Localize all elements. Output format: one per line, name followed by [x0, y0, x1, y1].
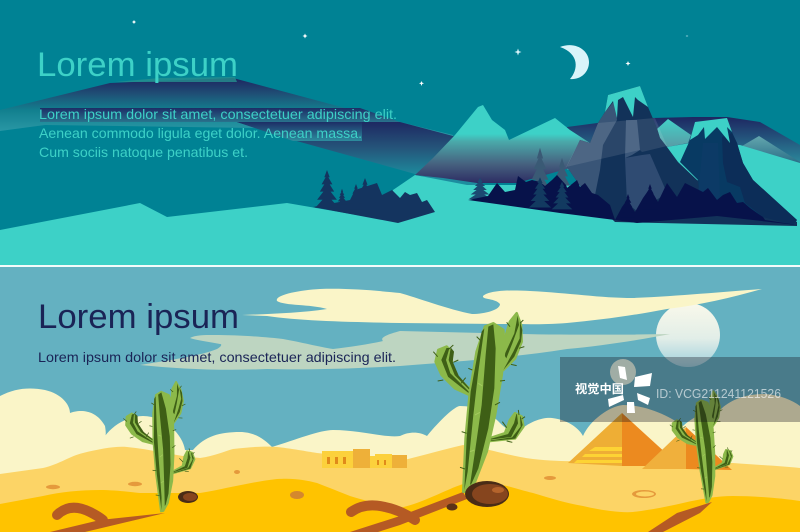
pyramids	[568, 413, 732, 470]
big mountain snow cap	[605, 86, 648, 118]
small volcano mountain	[680, 118, 797, 225]
right dark haze band	[567, 117, 800, 170]
small mountain snow cap	[690, 118, 732, 143]
left dark haze band	[0, 78, 453, 150]
text block: bottom description: Lorem ipsum dolor sit amet, consectetuer adipiscing elit.	[38, 349, 396, 365]
watermark brand text: 视觉中国	[575, 381, 624, 396]
pebbles	[46, 470, 656, 498]
cactus: centre	[433, 313, 525, 492]
watermark logo	[608, 359, 652, 413]
golden foreground dune	[0, 479, 800, 532]
text block: top description	[39, 106, 397, 160]
pale sand dune	[0, 445, 800, 532]
heading: bottom: Lorem ipsum	[38, 298, 239, 336]
watermark id: ID: VCG211241121526	[656, 386, 781, 401]
crescent moon	[560, 45, 589, 79]
cactus: left	[119, 381, 204, 515]
panel: night mountains	[0, 0, 800, 266]
stars	[132, 20, 688, 86]
small back peaks	[657, 119, 800, 165]
watermark banner	[560, 357, 800, 422]
cactus: right	[665, 390, 742, 507]
night sky	[0, 0, 800, 266]
panel: desert	[0, 267, 800, 532]
heading: top: Lorem ipsum	[37, 46, 238, 84]
turquoise ground	[0, 143, 800, 265]
text block: top description: Cum sociis natoque penatibus et.	[39, 144, 248, 160]
village houses	[322, 449, 407, 468]
horizon clouds	[0, 388, 800, 480]
text backing strip: second line	[237, 122, 362, 141]
rocks	[178, 481, 509, 510]
lower dark haze band	[237, 122, 480, 195]
divider	[0, 265, 800, 267]
brown shadows and branches	[50, 492, 712, 532]
text backing strip: first line	[40, 108, 400, 122]
big mountain	[566, 86, 797, 226]
lower green-tinted cloud	[140, 331, 670, 370]
sun	[656, 303, 720, 367]
dark pine forest	[468, 175, 797, 225]
text block: top description: Lorem ipsum dolor sit amet, consectetuer adipiscing elit.	[39, 106, 397, 122]
text block: top description: Aenean commodo ligula eget dolor. Aenean massa.	[39, 125, 362, 141]
upper cream cloud	[242, 289, 762, 324]
desert sky	[0, 267, 800, 532]
left pine forest	[313, 170, 435, 223]
left gradient mountains	[415, 105, 590, 183]
pale pine trees	[469, 148, 575, 206]
title backing strip	[115, 77, 237, 82]
